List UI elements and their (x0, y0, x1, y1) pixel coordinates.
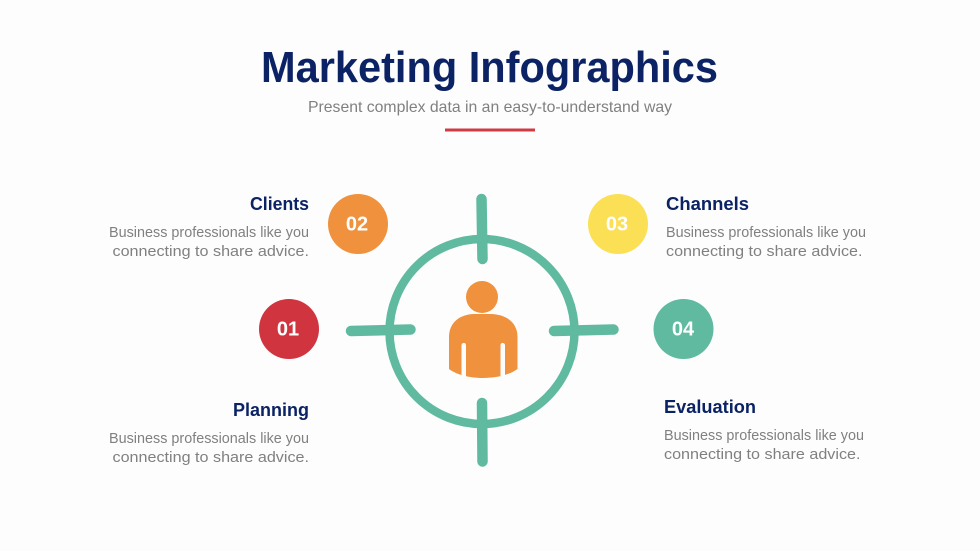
icon: person (449, 281, 518, 380)
text block: Evaluation: Evaluation (664, 396, 756, 417)
text block: Evaluation (664, 396, 864, 463)
badge 02: 02 (346, 214, 368, 236)
text block: Evaluation: Business professionals like you (664, 427, 864, 444)
target crosshair (351, 199, 614, 462)
text block: Clients: Clients (250, 193, 309, 214)
badge 04 (654, 299, 714, 359)
text block: Evaluation: connecting to share advice. (664, 446, 860, 463)
text block: Clients: Business professionals like you (109, 224, 309, 241)
text block: Channels: connecting to share advice. (666, 243, 862, 260)
text block: Channels: Channels (666, 193, 749, 214)
badge 03: 03 (606, 214, 628, 236)
badge 01: 01 (277, 318, 299, 340)
title underline (445, 128, 535, 132)
text block: Clients (109, 193, 309, 260)
text block: Channels: Business professionals like you (666, 224, 866, 241)
badge 03 (588, 194, 648, 254)
badge 01 (259, 299, 319, 359)
subtitle: Present complex data in an easy-to-understand way (308, 99, 672, 116)
text block: Planning: Planning (233, 399, 309, 420)
badge 02 (328, 194, 388, 254)
text block: Channels (666, 193, 866, 260)
text block: Planning (109, 399, 309, 466)
text block: Planning: Business professionals like you (109, 430, 309, 447)
text block: Planning: connecting to share advice. (112, 449, 309, 466)
badge 04: 04 (672, 318, 695, 340)
text block: Clients: connecting to share advice. (112, 243, 309, 260)
title: Marketing Infographics (261, 43, 718, 92)
